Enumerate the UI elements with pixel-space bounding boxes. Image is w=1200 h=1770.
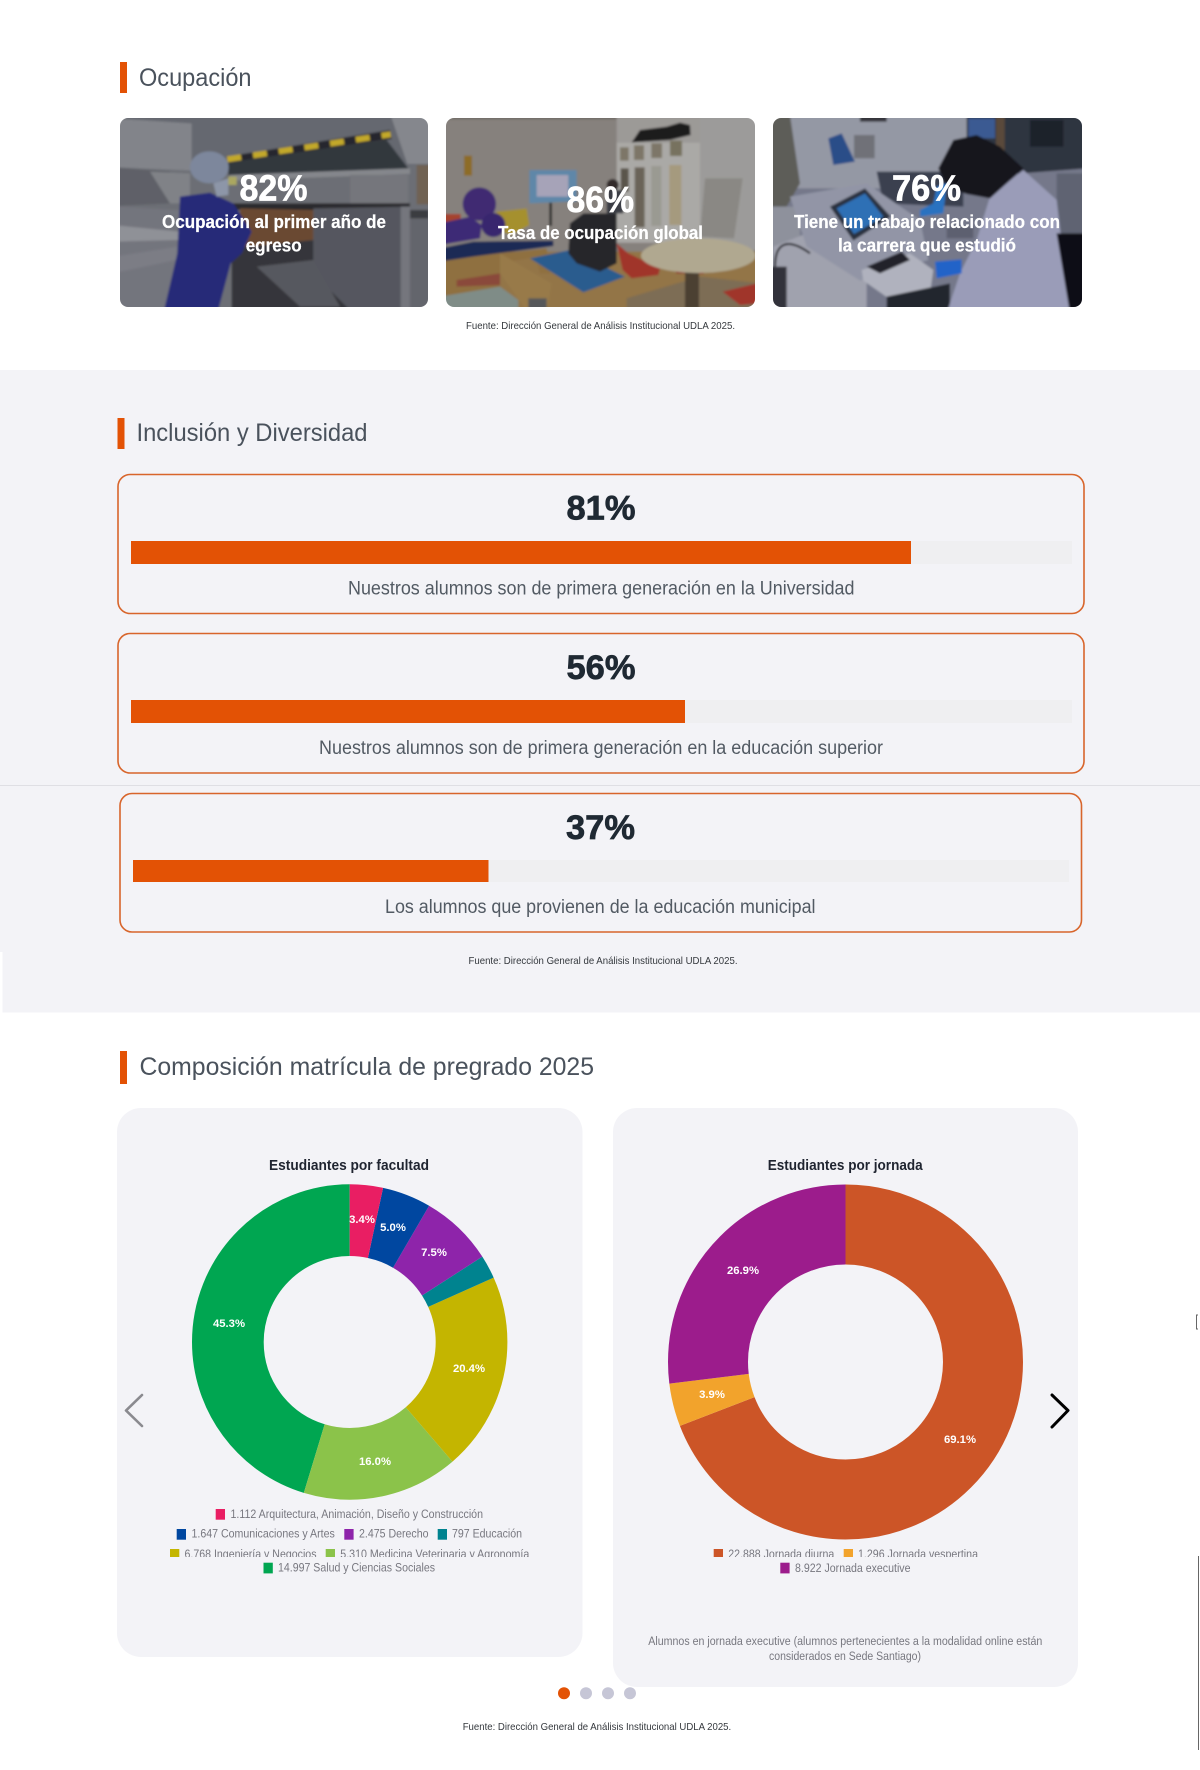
legend: facultad: 797 Educación bbox=[452, 1527, 522, 1541]
arrow: previous bbox=[126, 1395, 142, 1426]
section: Ocupación bbox=[113, 62, 1087, 332]
source note: Composición: Fuente: Dirección General de Análisis Institucional UDLA 2025. bbox=[463, 1721, 731, 1733]
card: 86% tasa de ocupación global bbox=[440, 113, 760, 315]
stat card: 37%: 37% bbox=[566, 809, 635, 847]
donut chart: facultad: 7.5% bbox=[421, 1247, 447, 1259]
donut chart: facultad: 20.4% bbox=[453, 1363, 485, 1375]
chart title: jornada: Estudiantes por jornada bbox=[768, 1158, 924, 1174]
card: 76% trabajo relacionado con la carrera: Tiene un trabajo relacionado con bbox=[794, 212, 1060, 232]
stat card: 81% bbox=[118, 474, 1084, 614]
donut chart: jornada: 3.9% bbox=[699, 1389, 725, 1401]
donut chart: jornada: 26.9% bbox=[727, 1265, 759, 1277]
legend: facultad: 2.475 Derecho bbox=[359, 1527, 429, 1541]
legend: facultad: 6.768 Ingeniería y Negocios bbox=[184, 1547, 316, 1561]
stat card: 37% bbox=[120, 794, 1082, 932]
legend: jornada: 1.296 Jornada vespertina bbox=[858, 1547, 978, 1561]
donut chart: facultad: 5.0% bbox=[380, 1222, 406, 1234]
card: 82% ocupación al primer año: egreso bbox=[246, 236, 302, 256]
heading: Composición matrícula de pregrado 2025: Composición matrícula de pregrado 2025 bbox=[140, 1054, 594, 1081]
arrow: next bbox=[1052, 1395, 1068, 1427]
note: jornada executive bbox=[648, 1634, 1042, 1663]
donut chart: facultad: 16.0% bbox=[359, 1456, 391, 1468]
section: Inclusión y Diversidad bbox=[0, 370, 1200, 1012]
stat card: 56%: 56% bbox=[566, 649, 636, 687]
stat card: 81%: 81% bbox=[566, 490, 636, 528]
source note: Inclusión: Fuente: Dirección General de Análisis Institucional UDLA 2025. bbox=[468, 955, 738, 967]
carousel dots bbox=[558, 1687, 636, 1699]
panel: Estudiantes por facultad bbox=[117, 1108, 582, 1657]
donut chart: facultad bbox=[213, 1214, 485, 1468]
panel: Estudiantes por jornada bbox=[613, 1108, 1078, 1687]
section: Composición matrícula bbox=[117, 1051, 1078, 1733]
card: 86% tasa de ocupación global: 86% bbox=[566, 179, 634, 220]
card: 76% trabajo relacionado con la carrera: la carrera que estudió bbox=[838, 236, 1016, 256]
stat card: 56% bbox=[118, 634, 1084, 773]
legend: facultad: 5.310 Medicina Veterinaria y Agronomía bbox=[340, 1547, 529, 1561]
donut chart: facultad: 45.3% bbox=[213, 1318, 245, 1330]
card: 76% trabajo relacionado con la carrera bbox=[767, 113, 1087, 313]
legend: jornada: 8.922 Jornada executive bbox=[795, 1561, 911, 1575]
heading: Ocupación: Ocupación bbox=[139, 65, 252, 92]
stat card: 37%: Los alumnos que provienen de la educación municipal bbox=[385, 897, 816, 918]
donut chart: jornada bbox=[699, 1224, 983, 1500]
legend: facultad: 14.997 Salud y Ciencias Sociales bbox=[278, 1561, 435, 1575]
source note: Ocupación: Fuente: Dirección General de Análisis Institucional UDLA 2025. bbox=[466, 320, 735, 332]
card: 76% trabajo relacionado con la carrera: 76% bbox=[892, 168, 961, 208]
legend: jornada: 22.888 Jornada diurna bbox=[728, 1547, 834, 1561]
donut chart: facultad: 3.4% bbox=[349, 1214, 375, 1226]
card: 82% ocupación al primer año: Ocupación al primer año de bbox=[162, 212, 386, 232]
chart title: facultad: Estudiantes por facultad bbox=[269, 1158, 429, 1174]
legend: facultad: 1.647 Comunicaciones y Artes bbox=[192, 1527, 335, 1541]
note: jornada executive: considerados en Sede Santiago) bbox=[769, 1649, 921, 1663]
card: 82% ocupación al primer año bbox=[113, 113, 433, 313]
legend: facultad: 1.112 Arquitectura, Animación, Diseño y Construcción bbox=[230, 1507, 483, 1521]
note: jornada executive: Alumnos en jornada executive (alumnos pertenecientes a la modalidad online están bbox=[648, 1634, 1042, 1648]
donut chart: jornada: 69.1% bbox=[944, 1434, 976, 1446]
stat card: 56%: Nuestros alumnos son de primera generación en la educación superior bbox=[319, 738, 884, 759]
heading: Inclusión y Diversidad: Inclusión y Diversidad bbox=[136, 420, 368, 447]
card: 82% ocupación al primer año: 82% bbox=[240, 168, 308, 208]
card: 86% tasa de ocupación global: Tasa de ocupación global bbox=[498, 223, 703, 243]
legend: facultad bbox=[170, 1507, 529, 1575]
legend: jornada bbox=[714, 1549, 978, 1574]
stat card: 81%: Nuestros alumnos son de primera generación en la Universidad bbox=[348, 578, 854, 600]
